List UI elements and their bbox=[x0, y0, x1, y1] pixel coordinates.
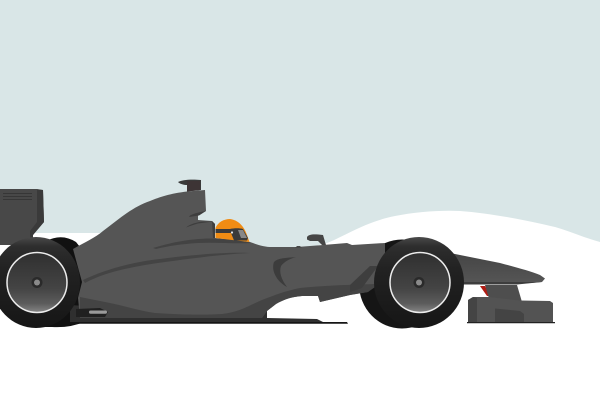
snow ground bbox=[0, 211, 600, 400]
nose underside bbox=[463, 282, 542, 284]
main body bbox=[73, 190, 385, 318]
engine air intake bbox=[178, 180, 201, 192]
airbox lines bbox=[186, 211, 213, 228]
front wing bbox=[467, 285, 555, 323]
rear wheel bbox=[0, 237, 80, 328]
floor shadow line bbox=[70, 322, 348, 324]
rear wing bbox=[0, 189, 44, 245]
side bump bbox=[295, 246, 302, 248]
rear far wheel bbox=[40, 237, 84, 327]
side inlet bbox=[273, 257, 296, 287]
helmet bbox=[216, 219, 250, 242]
cockpit side bbox=[212, 221, 215, 238]
suspension arm bbox=[350, 266, 378, 292]
front wheel bbox=[374, 237, 464, 328]
lower body shade bbox=[80, 280, 385, 318]
car bbox=[0, 180, 555, 324]
exhaust highlight bbox=[89, 310, 107, 314]
floor bbox=[70, 305, 323, 322]
red strut bbox=[480, 286, 490, 296]
sidepod crease bbox=[83, 253, 250, 283]
nose bbox=[445, 252, 545, 284]
mirror bbox=[307, 234, 326, 245]
wing stay bbox=[485, 285, 522, 302]
front far wheel bbox=[359, 240, 445, 328]
rear exhaust bbox=[76, 308, 108, 317]
cockpit edge bbox=[153, 238, 251, 249]
